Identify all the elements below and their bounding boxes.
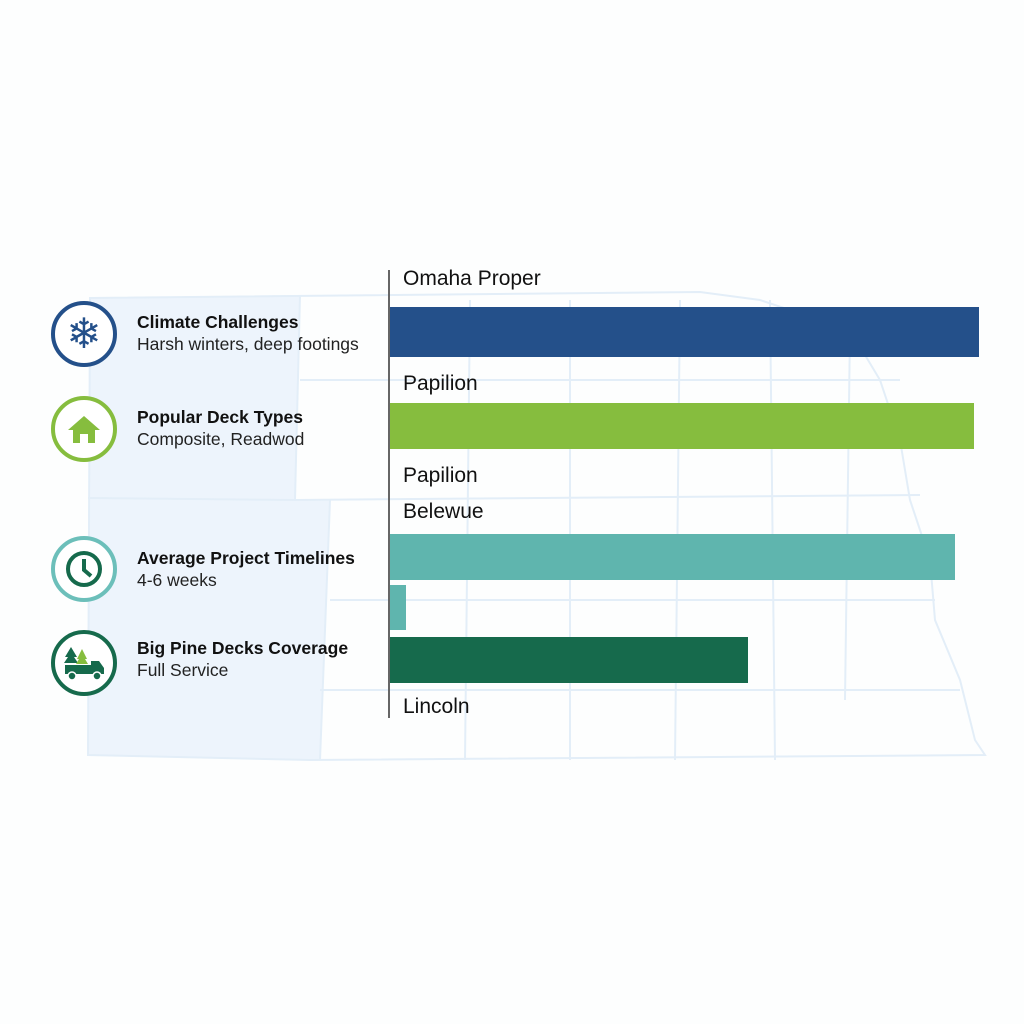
text: deck types: Popular Deck Types (137, 407, 303, 427)
icon: house (51, 396, 117, 462)
text: timelines: 4-6 weeks (137, 570, 217, 590)
text: deck types (137, 407, 304, 449)
text: coverage (137, 638, 348, 680)
text: climate: Harsh winters, deep footings (137, 334, 359, 354)
text: coverage: Big Pine Decks Coverage (137, 638, 348, 658)
icon: clock (51, 536, 117, 602)
icon: snowflake (51, 301, 117, 367)
text: coverage: Full Service (137, 660, 228, 680)
label: Papilion: Papilion (403, 372, 478, 395)
icon: truck with trees (51, 630, 117, 696)
text: timelines: Average Project Timelines (137, 548, 355, 568)
label: Belewue: Belewue (403, 500, 484, 523)
text: climate (137, 312, 359, 354)
label: Omaha Proper: Omaha Proper (403, 267, 541, 290)
bar: Papilion (390, 403, 974, 449)
label: Papilion 2: Papilion (403, 464, 478, 487)
icon: snowflake: ❄ (66, 310, 102, 357)
text: climate: Climate Challenges (137, 312, 298, 332)
text: timelines (137, 548, 355, 590)
label: Lincoln: Lincoln (403, 695, 470, 718)
bar: small teal (390, 585, 406, 630)
axis line (388, 270, 390, 718)
bar: Omaha (390, 307, 979, 357)
bar: Lincoln (390, 637, 748, 683)
text: deck types: Composite, Readwod (137, 429, 304, 449)
bar: Belewue (390, 534, 955, 580)
